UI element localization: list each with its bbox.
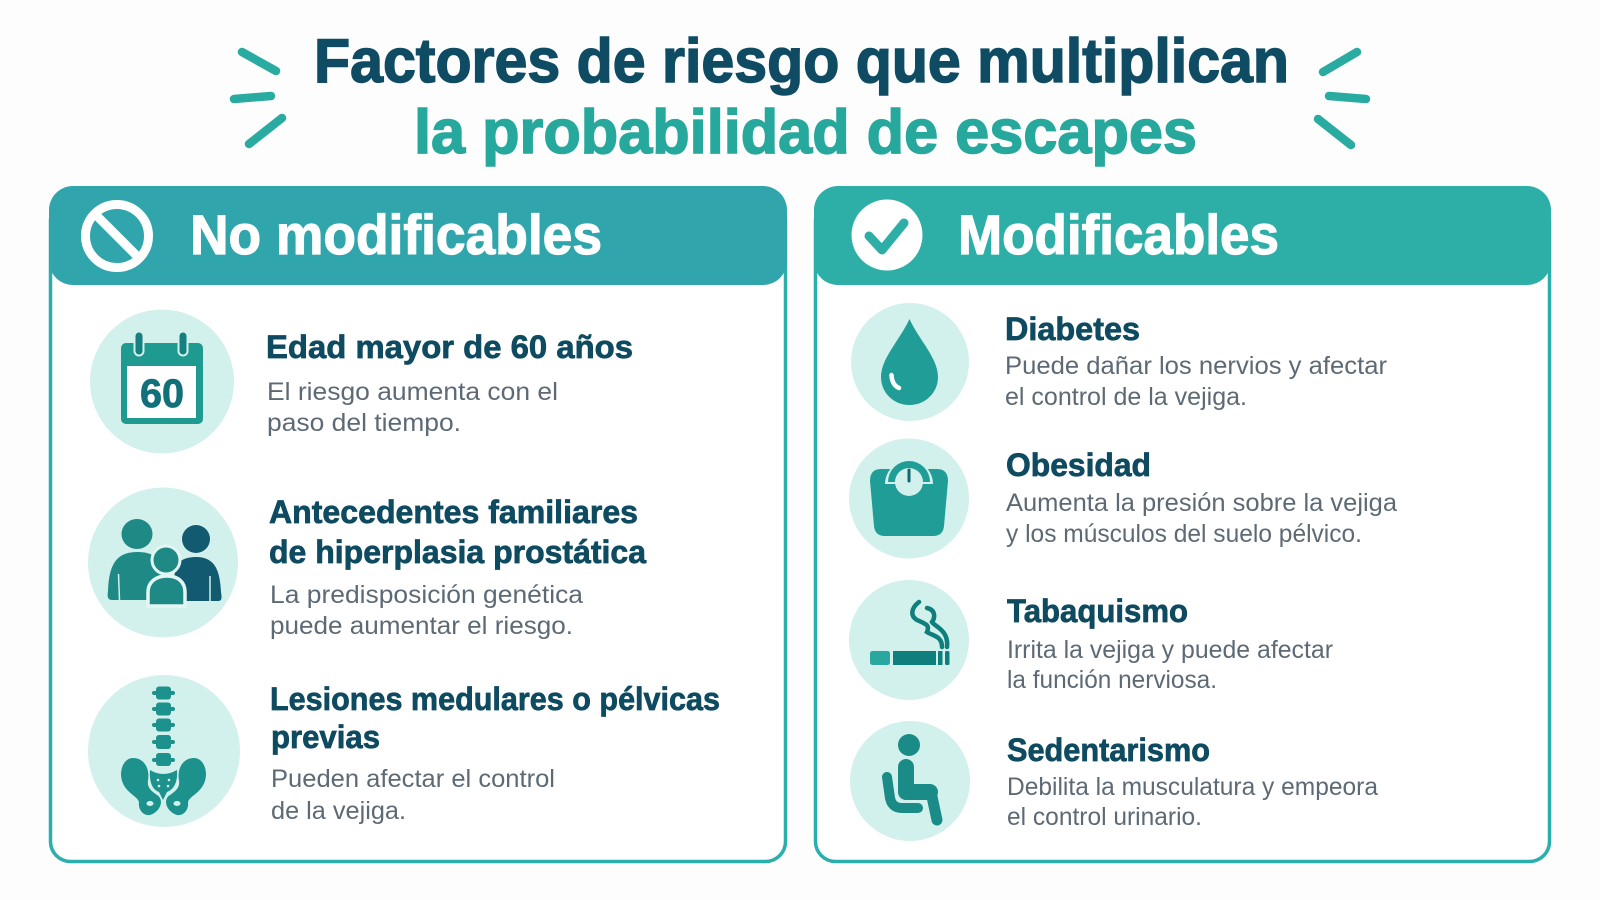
text: antecedentes: Antecedentes familiares [269,494,638,530]
icon: calendar 60 [90,310,234,454]
panel header bar [49,186,787,285]
text: diabetes: Puede dañar los nervios y afectar [1005,352,1387,380]
text: edad: Edad mayor de 60 años [266,329,633,365]
item: lesiones [88,675,720,827]
title: Factores de riesgo que multiplican [314,27,1289,96]
icon: check mark [852,200,922,270]
title: la probabilidad de escapes [414,98,1197,167]
panel outline [816,200,1550,862]
left title rays [234,52,282,144]
icon: family [88,488,238,638]
item: obesidad [849,438,1397,558]
icon: seated person [850,721,970,841]
panel: modificables [814,186,1551,862]
title [314,27,1289,167]
item: sedentarismo [850,721,1378,841]
text: diabetes: Diabetes [1005,311,1140,347]
heading: modificables: Modificables [958,203,1279,266]
panel outline [50,200,786,862]
text: lesiones: Lesiones medulares o pélvicas [270,681,720,717]
text: sedentarismo [1007,732,1378,831]
text: obesidad [1006,447,1397,548]
panel: no modificables [49,186,787,862]
text: tabaquismo [1007,593,1333,694]
text: tabaquismo: Irrita la vejiga y puede afectar [1007,636,1333,664]
text: edad [266,329,633,437]
icon: spine and pelvis [88,675,240,827]
panel header bar [814,186,1551,285]
icon: cigarette [849,580,969,700]
text: antecedentes: de hiperplasia prostática [269,534,646,570]
text: edad: paso del tiempo. [267,409,461,437]
text: lesiones: de la vejiga. [271,797,406,825]
text: diabetes [1005,311,1387,411]
icon: calendar 60: 60 [140,372,184,416]
text: lesiones: previas [271,719,380,755]
item: tabaquismo [849,580,1333,700]
text: diabetes: el control de la vejiga. [1005,383,1247,411]
text: sedentarismo: Sedentarismo [1007,732,1210,768]
text: sedentarismo: el control urinario. [1007,803,1202,831]
text: antecedentes [269,494,646,640]
text: tabaquismo: la función nerviosa. [1007,666,1217,694]
text: lesiones: Pueden afectar el control [271,765,555,793]
text: antecedentes: La predisposición genética [270,581,583,609]
text: antecedentes: puede aumentar el riesgo. [270,612,573,640]
text: obesidad: y los músculos del suelo pélvico. [1006,520,1362,548]
heading: no modificables: No modificables [190,203,602,266]
item: edad [90,310,633,454]
icon: weight scale [849,438,969,558]
icon: water drop [851,303,969,421]
right title rays [1318,52,1366,145]
text: lesiones [270,681,720,825]
text: obesidad: Obesidad [1006,447,1151,483]
icon: prohibited sign [86,204,148,268]
text: sedentarismo: Debilita la musculatura y empeora [1007,773,1378,801]
text: edad: El riesgo aumenta con el [267,378,558,406]
text: obesidad: Aumenta la presión sobre la vejiga [1006,489,1397,517]
item: antecedentes [88,488,646,640]
item: diabetes [851,303,1387,421]
text: tabaquismo: Tabaquismo [1007,593,1188,629]
